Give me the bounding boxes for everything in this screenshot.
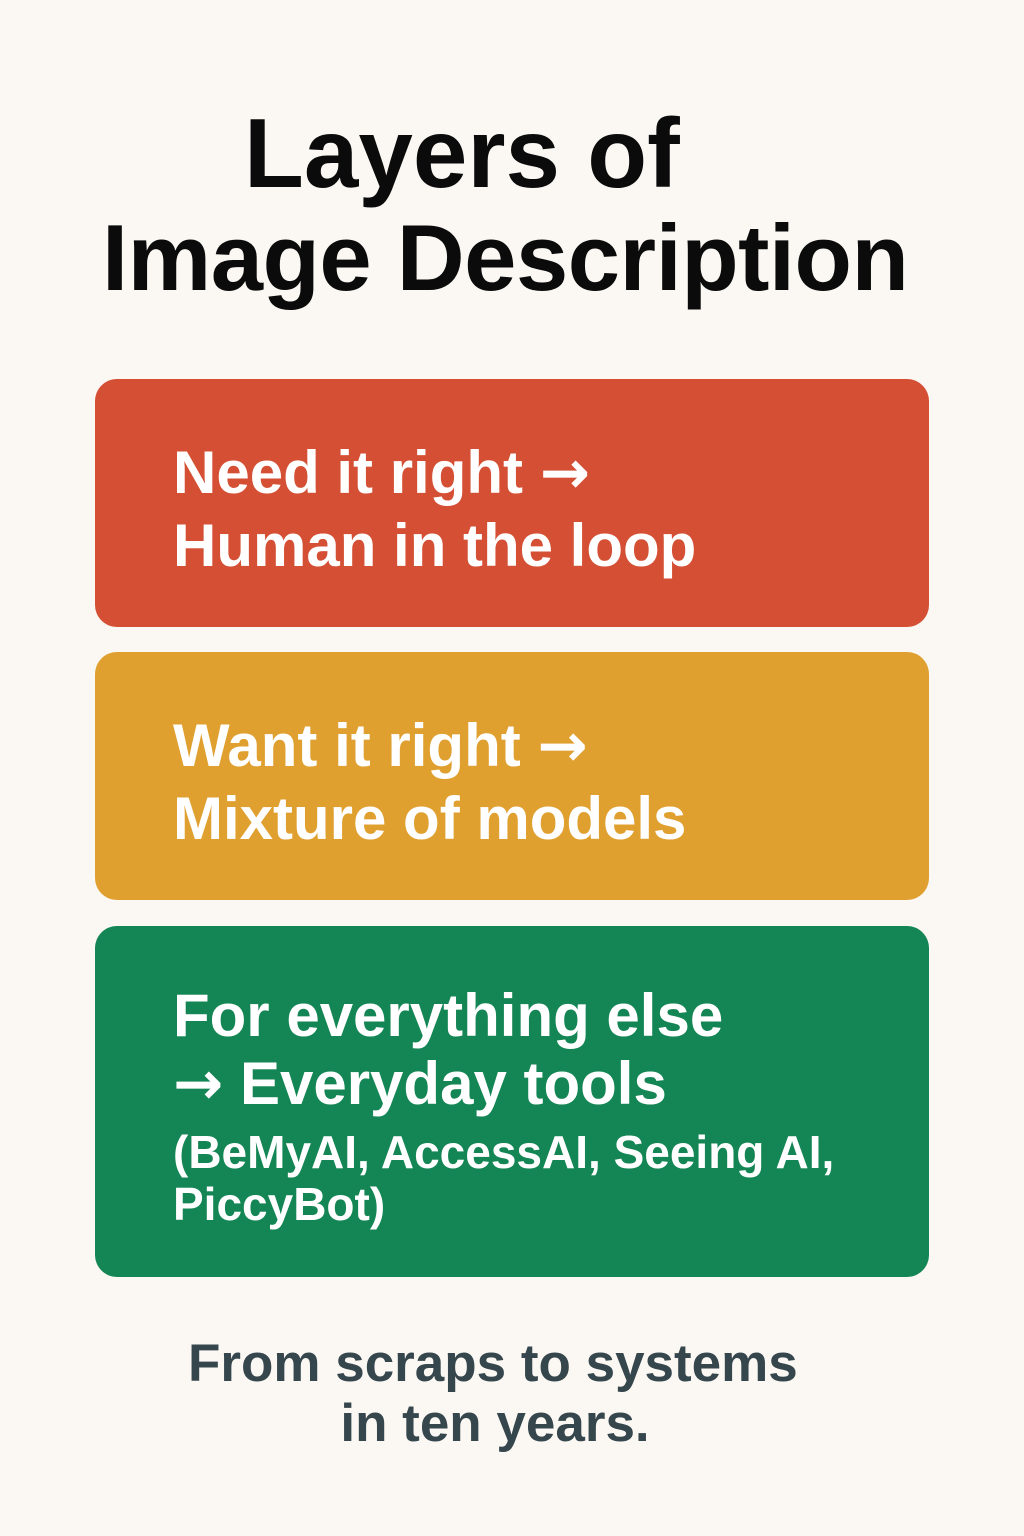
footer text: From scraps to systems [188, 1334, 798, 1393]
panel: need it right: Need it right → [173, 438, 590, 508]
panel: want it right [95, 652, 929, 900]
title: Layers of [244, 98, 680, 208]
panel: want it right: Mixture of models [173, 785, 686, 852]
footer text [188, 1334, 798, 1453]
panel: everything else: PiccyBot) [173, 1178, 385, 1230]
panel: everything else [95, 926, 929, 1277]
panel: want it right: Want it right → [173, 711, 588, 781]
footer text: in ten years. [340, 1394, 650, 1453]
panel: need it right [95, 379, 929, 627]
panel: need it right: Human in the loop [173, 512, 696, 579]
panel: everything else: For everything else [173, 982, 723, 1049]
title [102, 98, 908, 310]
title: Image Description [102, 205, 908, 310]
panel: everything else: → Everyday tools [173, 1049, 667, 1119]
panel: everything else: (BeMyAI, AccessAI, Seeing AI, [173, 1126, 834, 1178]
